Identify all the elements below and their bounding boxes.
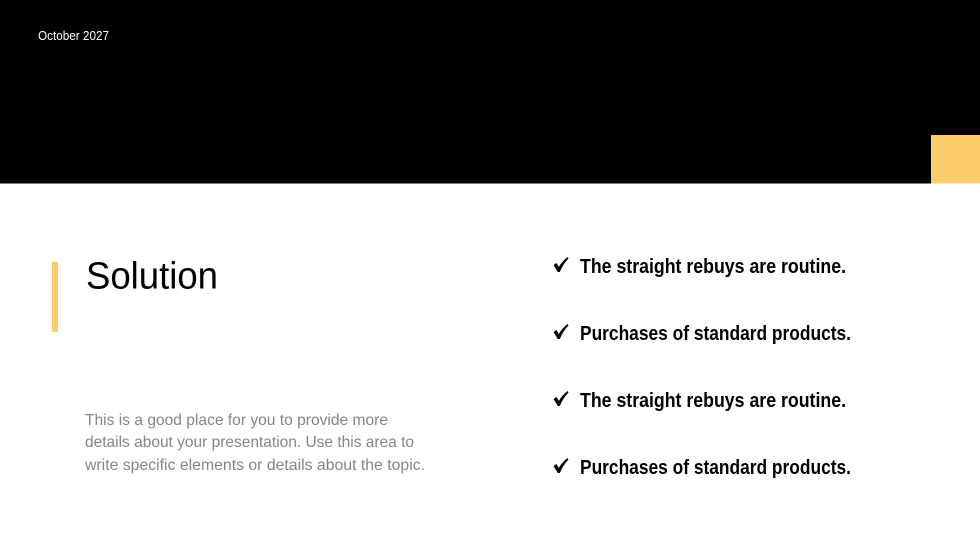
item 4 [554,456,851,479]
description text: write specific elements or details about the topic. [84,457,425,474]
title: Solution [86,256,218,298]
icon: check mark [554,257,568,272]
item 1 [554,255,846,278]
header band [0,0,980,184]
icon: check mark [554,458,568,473]
corner accent square [931,135,980,184]
item 2 [554,322,851,345]
icon: check mark [554,324,568,339]
description text: details about your presentation. Use this area to [85,434,414,451]
icon: check mark [554,391,568,406]
item text: Purchases of standard products. [580,456,851,479]
item text: Purchases of standard products. [580,322,851,345]
title accent bar [52,262,58,332]
date label: October 2027 [38,28,109,43]
description text: This is a good place for you to provide more [85,412,388,429]
item text: The straight rebuys are routine. [580,389,846,412]
item text: The straight rebuys are routine. [580,255,846,278]
description text [84,412,425,474]
checklist [554,255,851,479]
item 3 [554,389,846,412]
